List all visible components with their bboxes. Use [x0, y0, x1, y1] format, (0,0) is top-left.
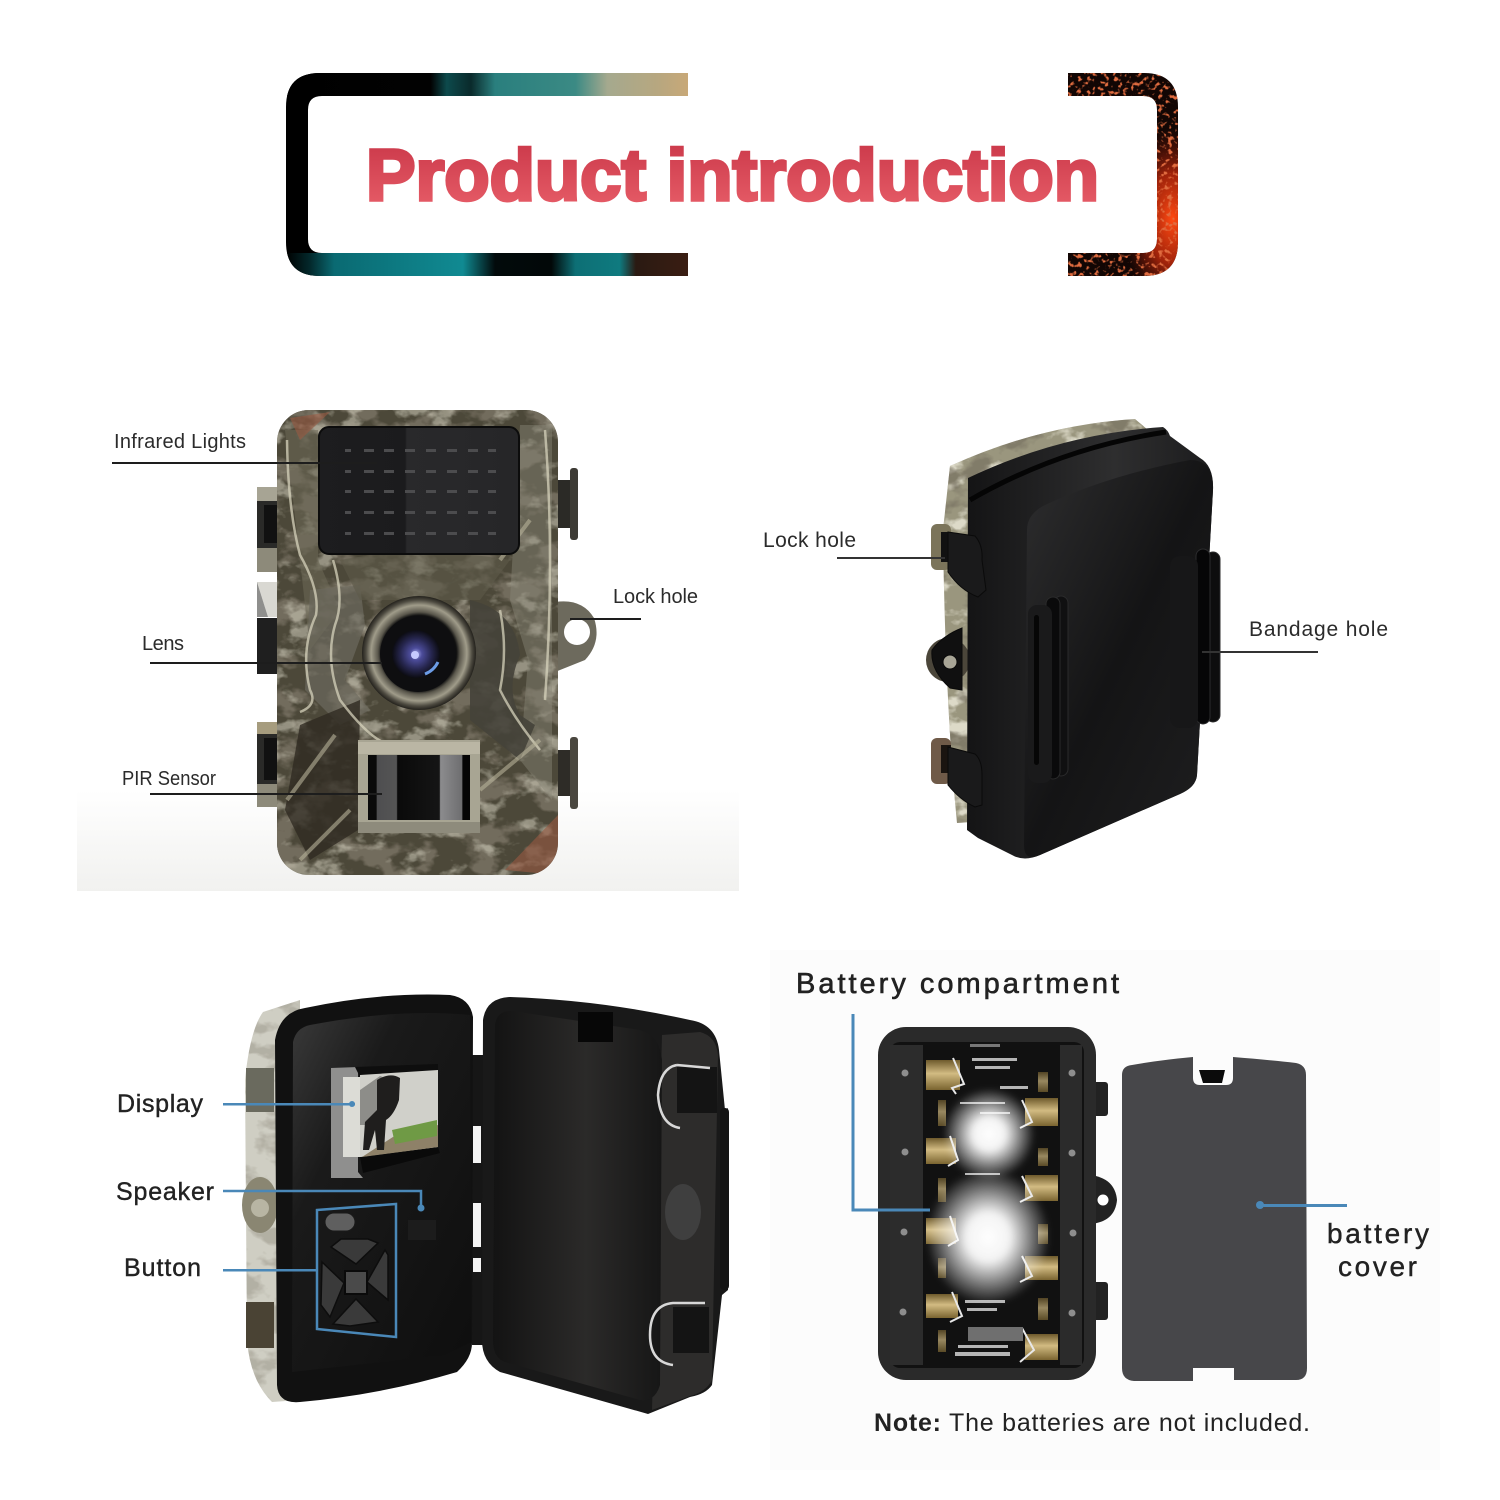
title text: Product introduction: [366, 136, 1099, 216]
blue line: button box: [223, 1204, 396, 1337]
label: display: Display: [117, 1090, 204, 1118]
photo of boar: [360, 1070, 438, 1157]
label: PIR sensor: PIR Sensor: [122, 768, 216, 790]
open rear case: [482, 997, 729, 1414]
note: Note: The batteries are not included.: [874, 1409, 1310, 1437]
side pegs on camo edge: [242, 1068, 278, 1348]
infrared LED array: [345, 449, 496, 535]
cover latch: [1199, 1070, 1225, 1083]
lens: [362, 596, 476, 710]
label: battery cover: [1327, 1218, 1429, 1282]
label: lens: Lens: [142, 633, 184, 655]
label: lock hole back: Lock hole: [763, 529, 856, 552]
label: battery cover: battery: [1327, 1218, 1429, 1249]
label: infrared lights: Infrared Lights: [114, 431, 246, 453]
button plate: [321, 1213, 388, 1326]
label: bandage hole: Bandage hole: [1249, 618, 1388, 641]
side hinge bosses: [677, 1067, 717, 1113]
display screen: [331, 1064, 440, 1178]
panel: front of camera: [257, 410, 597, 875]
label: speaker: Speaker: [116, 1178, 214, 1206]
right pegs: [555, 468, 578, 809]
camo body: [277, 410, 558, 875]
camo edge of open front: [245, 1000, 300, 1402]
shadow below photo: [360, 1147, 440, 1173]
label: battery cover: cover: [1338, 1251, 1417, 1282]
blue line: battery compartment: [853, 1014, 930, 1210]
black rear housing: [967, 427, 1213, 858]
inner well: [890, 1042, 1084, 1368]
label: lock hole front: Lock hole: [613, 586, 698, 608]
battery contacts: [926, 1060, 1058, 1360]
side rails: [890, 1045, 923, 1365]
blue line: display: [223, 1101, 355, 1107]
title banner: [286, 73, 1178, 276]
screws: [900, 1070, 1076, 1316]
panel: battery compartment: [878, 1027, 1117, 1380]
latch slot: [578, 1012, 613, 1042]
tabs and lug: [1090, 1082, 1117, 1320]
light glow: [926, 1088, 1050, 1305]
PIR sensor: [358, 740, 480, 833]
spring contacts: [948, 1058, 1034, 1362]
side straps and tabs: [257, 487, 285, 807]
carabiner rings: [650, 1065, 710, 1365]
camo edge: [944, 419, 1146, 823]
circuit details: [955, 1044, 1028, 1356]
camo tonal patches: [285, 430, 329, 630]
infrared lights panel: [319, 427, 519, 554]
strap loop left: [1028, 596, 1068, 783]
lock tabs: [932, 532, 986, 807]
panel: battery cover: [1122, 1057, 1307, 1381]
outer strap tab: [720, 1108, 729, 1290]
panel: battery area backdrop: [770, 950, 1440, 1470]
open front door: [275, 995, 473, 1402]
blue line: speaker: [223, 1191, 424, 1212]
inner plate: [292, 1013, 471, 1372]
lock hole lug: [555, 601, 597, 672]
rear face: [1024, 460, 1213, 857]
panel: front view backdrop: [77, 790, 739, 891]
label: lock hole front: [570, 586, 698, 620]
speaker grille: [408, 1220, 436, 1240]
blue line: battery cover: [1256, 1201, 1347, 1209]
heading: battery compartment: Battery compartment: [796, 968, 1119, 1000]
panel: camera opened: [240, 995, 729, 1414]
lock tabs camo: [926, 524, 970, 784]
rim edge: [970, 432, 1166, 500]
strap loop right: [1170, 549, 1220, 728]
banner frame: left colored bracket: [286, 73, 688, 276]
panel: back of camera: [926, 415, 1220, 858]
hinge gap: [472, 1055, 486, 1345]
label: button: Button: [124, 1254, 201, 1282]
banner frame: right fiery bracket: [1068, 73, 1178, 276]
case: [878, 1027, 1096, 1380]
